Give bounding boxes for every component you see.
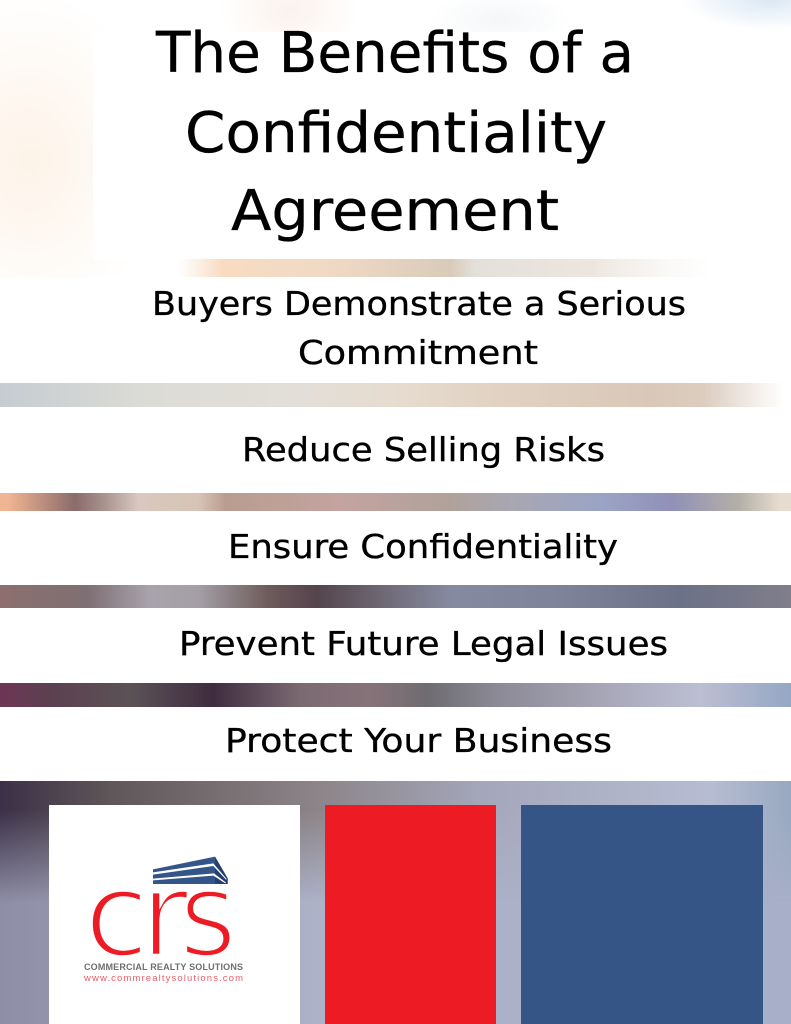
logo wordmark: r [140, 847, 189, 985]
blurred strip 5 [0, 683, 791, 707]
text: benefit 4: Prevent Future Legal Issues [179, 624, 668, 663]
panel: red block [325, 805, 496, 1024]
panel: benefit 4 [0, 608, 791, 683]
panel: blue block [521, 805, 763, 1024]
blurred strip 1 [0, 259, 791, 277]
text: benefit 1 line 2: Commitment [298, 333, 538, 372]
blurred strip 3 [0, 493, 791, 511]
text: benefit 2: Reduce Selling Risks [242, 430, 605, 469]
panel: benefit 3 [0, 511, 791, 585]
logo wordmark: c [84, 847, 149, 985]
icon: building roof [153, 857, 228, 884]
logo website: www.commrealtysolutions.com [83, 973, 243, 984]
text: benefit 1 line 1: Buyers Demonstrate a Serious [152, 284, 686, 323]
blurred photo background: bottom [0, 781, 791, 1024]
logo wordmark [84, 847, 237, 985]
blurred strip 4 [0, 585, 791, 608]
text: benefit 5: Protect Your Business [225, 721, 612, 760]
logo wordmark: s [179, 847, 237, 985]
heading: title line 2: Confidentiality [185, 101, 607, 166]
heading: title line 1: The Benefits of a [155, 21, 634, 86]
panel: benefit 5 [0, 707, 791, 781]
panel: benefit 2 [0, 407, 791, 493]
panel: benefit 1 [0, 277, 791, 383]
panel: title [93, 21, 703, 260]
panel: logo card [49, 805, 300, 1024]
blurred photo background: top [0, 0, 791, 330]
text: benefit 3: Ensure Confidentiality [228, 527, 618, 566]
heading: title line 3: Agreement [231, 179, 559, 244]
blurred strip 2 [0, 383, 791, 407]
logo company name: COMMERCIAL REALTY SOLUTIONS [84, 962, 243, 972]
